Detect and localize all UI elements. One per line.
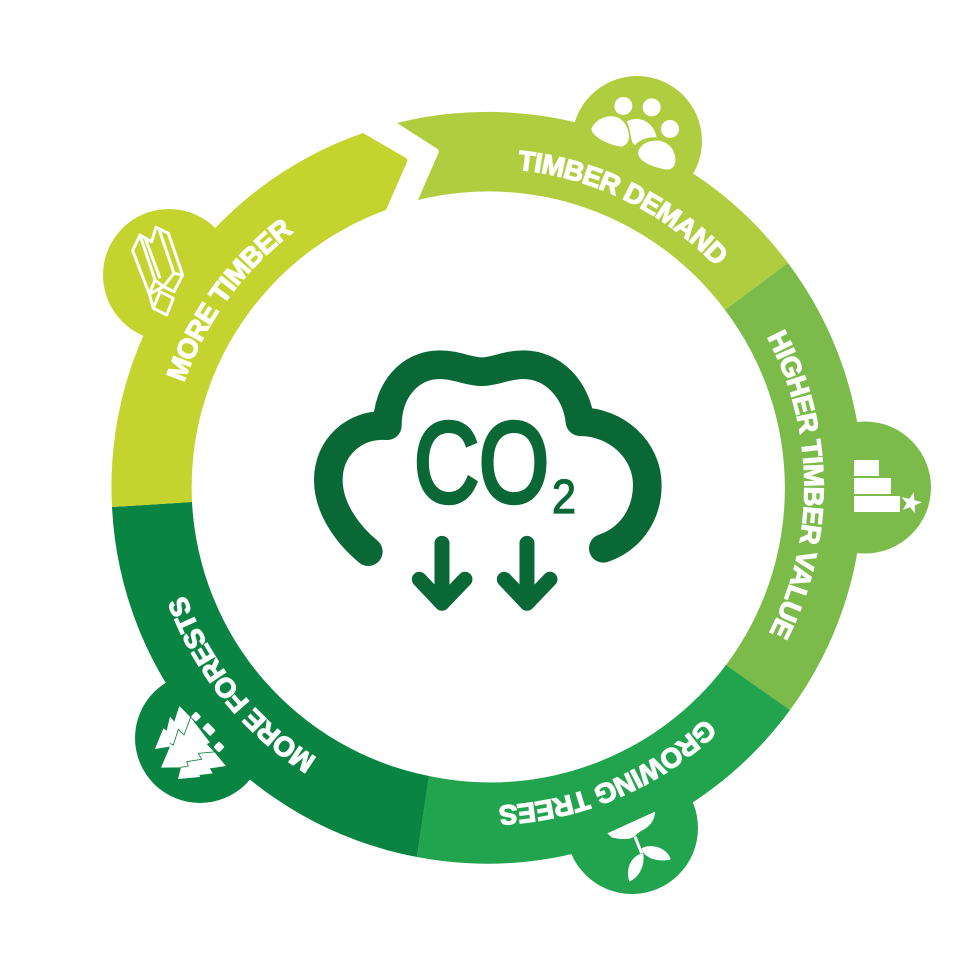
icon: stacked bars with star (854, 460, 924, 514)
label: timber demand: TIMBER DEMAND (518, 150, 726, 263)
icon: CO2 cloud with down arrows (328, 365, 647, 603)
panel: higher timber value segment (725, 263, 931, 710)
label: growing trees: GROWING TREES (499, 722, 714, 826)
icon: people group (592, 97, 679, 169)
panel: more forests segment (112, 502, 429, 857)
CO2 text: 2 (552, 471, 576, 524)
icon: timber beams (133, 227, 183, 315)
panel: growing trees segment (417, 665, 790, 894)
icon: sprout (607, 812, 671, 882)
label: more forests: MORE FORESTS (169, 597, 316, 774)
label: higher timber value: HIGHER TIMBER VALUE (767, 329, 824, 640)
cloud outline (328, 365, 647, 552)
icon: pine trees (155, 706, 226, 779)
label: more timber: MORE TIMBER (166, 220, 294, 382)
down arrows (419, 543, 550, 603)
panel: more timber segment (103, 133, 408, 507)
CO2 text: CO (414, 400, 549, 527)
panel: timber demand segment (397, 76, 788, 310)
